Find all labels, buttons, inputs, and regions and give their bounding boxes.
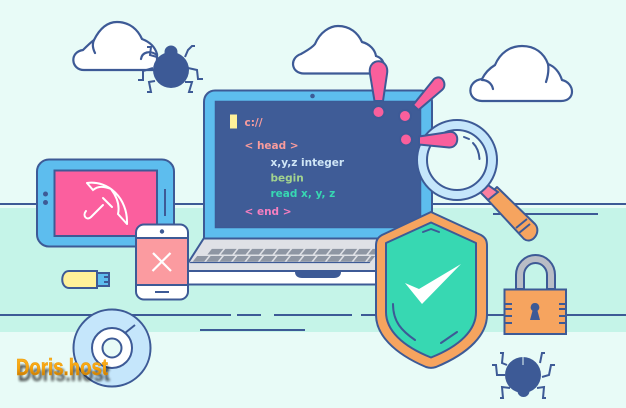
laptop notch bbox=[295, 272, 341, 278]
watermark: Doris.host bbox=[16, 354, 108, 380]
code text bbox=[244, 117, 345, 218]
bug top bbox=[138, 46, 203, 92]
keyboard bbox=[190, 252, 379, 262]
watermark: Doris.host bbox=[18, 360, 110, 386]
laptop base bbox=[188, 271, 400, 284]
icon: cross bbox=[152, 253, 171, 271]
magnifying glass bbox=[417, 120, 537, 241]
cd disc bbox=[74, 310, 150, 386]
watermark bbox=[16, 354, 110, 386]
icon: umbrella bbox=[85, 183, 127, 224]
bug bottom bbox=[492, 353, 555, 398]
code text: c:// bbox=[244, 117, 263, 129]
code text: read x, y, z bbox=[270, 188, 335, 200]
camera bbox=[310, 94, 315, 98]
code text: begin bbox=[270, 172, 304, 184]
alert marks bbox=[370, 61, 457, 148]
code text: < head > bbox=[244, 140, 299, 152]
shield bbox=[376, 212, 487, 368]
laptop lid bbox=[204, 90, 432, 238]
laptop bbox=[188, 90, 432, 284]
code text: x,y,z integer bbox=[270, 157, 345, 169]
handle bbox=[486, 187, 537, 241]
background mint band bbox=[0, 204, 626, 332]
keyhole bbox=[530, 303, 540, 320]
cloud center bbox=[293, 26, 384, 74]
padlock bbox=[504, 255, 566, 334]
cursor bbox=[230, 114, 237, 128]
cloud left bbox=[73, 22, 157, 70]
phone bbox=[136, 224, 188, 300]
check mark bbox=[405, 264, 461, 304]
cloud right bbox=[470, 46, 572, 101]
tablet bbox=[37, 160, 174, 246]
usb stick bbox=[62, 271, 109, 288]
code text: < end > bbox=[244, 206, 292, 218]
